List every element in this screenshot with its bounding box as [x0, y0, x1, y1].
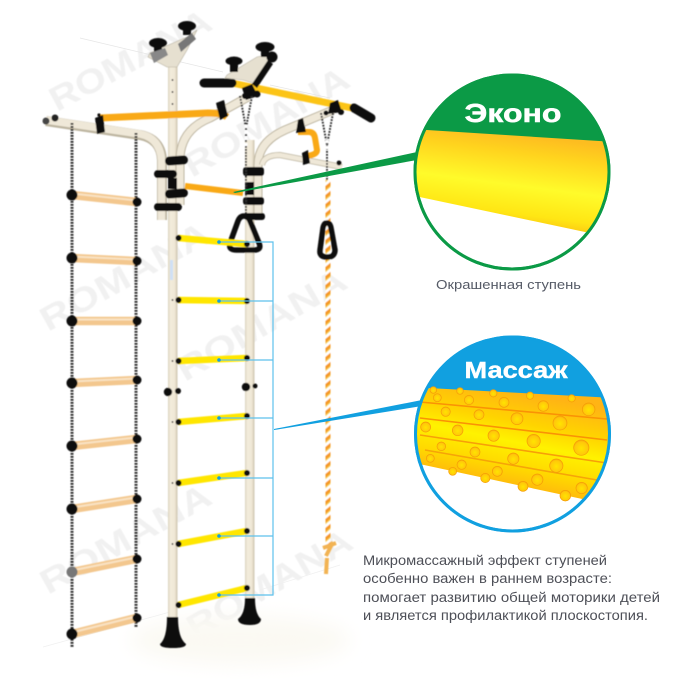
description text: помогает развитию общей моторики детей [363, 590, 660, 605]
gymnastic rings [230, 216, 335, 257]
floor shadow [130, 616, 350, 664]
rope ladder [42, 114, 162, 647]
top pull-up bar [232, 83, 352, 108]
main poles [160, 66, 261, 648]
callout: Эконо [410, 70, 614, 269]
orange bars [100, 113, 227, 118]
wall bars equipment [42, 21, 371, 648]
blue pointer line [274, 400, 422, 430]
yellow rungs [176, 235, 250, 608]
description text: Микромассажный эффект ступеней [363, 553, 607, 568]
heading: Эконо: Эконо [464, 98, 562, 128]
watermarks: ROMANA: ROMANA [180, 522, 359, 647]
description text: особенно важен в раннем возрасте: [363, 571, 612, 586]
caption: Окрашенная ступень: Окрашенная ступень [436, 277, 581, 292]
watermarks: ROMANA: ROMANA [177, 60, 356, 185]
description text: и является профилактикой плоскостопия. [363, 608, 648, 623]
room edge lines [43, 38, 340, 647]
green pointer line [233, 152, 417, 193]
watermarks: ROMANA: ROMANA [170, 261, 354, 389]
watermarks: ROMANA [33, 2, 359, 647]
clamps [95, 84, 344, 220]
ring chains [240, 96, 333, 222]
heading: Массаж: Массаж [464, 357, 568, 383]
description text [363, 553, 660, 623]
ceiling brackets [148, 21, 278, 88]
watermarks: ROMANA: ROMANA [33, 215, 216, 339]
feet [160, 617, 186, 648]
wooden rungs [72, 195, 137, 634]
callout: Массаж [410, 330, 616, 531]
blue bracket connector [217, 240, 273, 597]
upper arms [100, 83, 371, 215]
ladder chains [72, 123, 136, 647]
top bar for rope ladder [46, 121, 162, 220]
rope [323, 180, 336, 574]
watermarks: ROMANA: ROMANA [33, 477, 218, 602]
watermarks: ROMANA: ROMANA [43, 2, 218, 119]
